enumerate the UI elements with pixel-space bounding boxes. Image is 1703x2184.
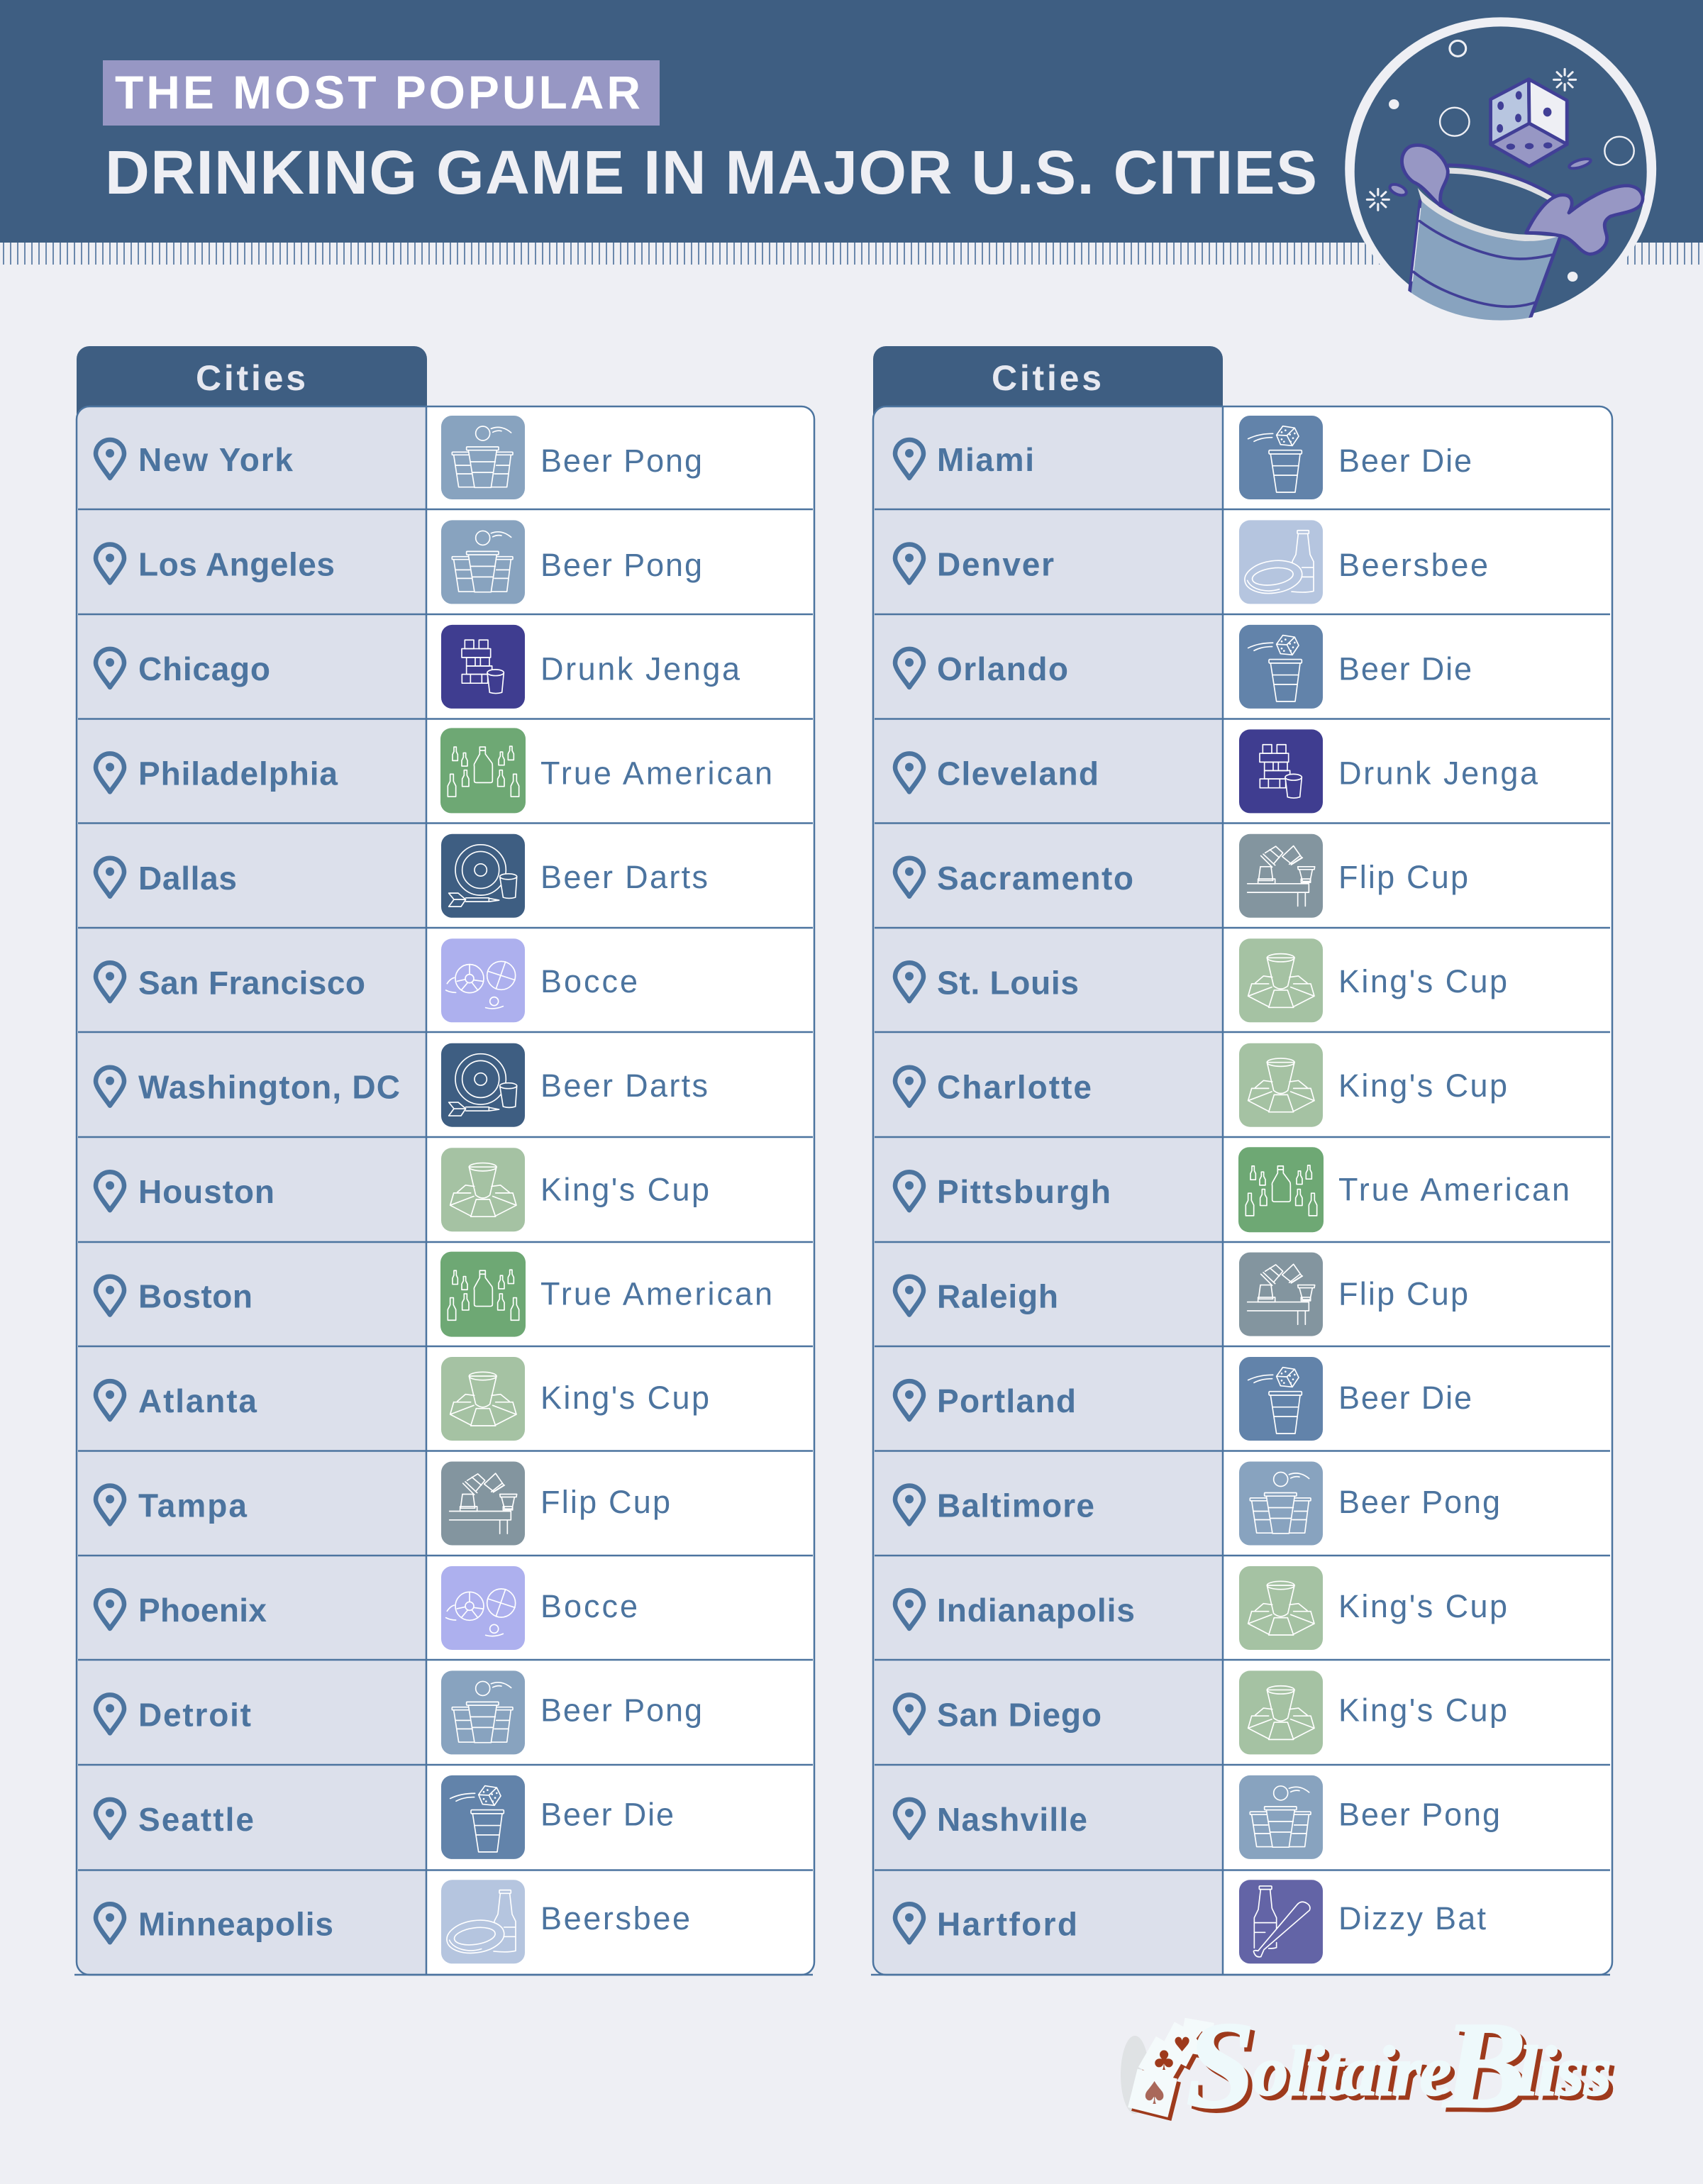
row: Hartford: Hartford bbox=[937, 1905, 1077, 1942]
row: Charlotte: Charlotte bbox=[937, 1069, 1092, 1106]
bubbles and sparkles bbox=[1367, 40, 1634, 282]
row: San Diego: King's Cup bbox=[1338, 1692, 1507, 1729]
row: San Francisco: San Francisco bbox=[138, 964, 365, 1001]
illustration: beer cup with die bbox=[1345, 17, 1656, 331]
row: Baltimore bbox=[895, 1461, 1500, 1545]
row: Portland: Portland bbox=[937, 1382, 1076, 1419]
row: Orlando bbox=[895, 625, 1472, 709]
row: Atlanta bbox=[96, 1357, 709, 1441]
row: Minneapolis: Beersbee bbox=[540, 1900, 690, 1936]
column tab: Cities: Cities bbox=[196, 358, 306, 398]
row: Raleigh: Flip Cup bbox=[1338, 1275, 1468, 1312]
row: Denver: Beersbee bbox=[1338, 547, 1488, 583]
cup bbox=[1402, 165, 1560, 331]
row: Cleveland: Drunk Jenga bbox=[1338, 755, 1538, 791]
row: Atlanta: King's Cup bbox=[540, 1380, 709, 1416]
row: Houston bbox=[96, 1148, 709, 1231]
row: Denver: Denver bbox=[937, 546, 1054, 583]
row: Indianapolis: Indianapolis bbox=[937, 1592, 1135, 1629]
row: Baltimore: Baltimore bbox=[937, 1487, 1094, 1524]
row: Sacramento: Flip Cup bbox=[1338, 859, 1468, 895]
row: Indianapolis bbox=[895, 1566, 1507, 1650]
row: Los Angeles bbox=[96, 520, 702, 604]
row: Miami bbox=[895, 416, 1472, 499]
row: Boston bbox=[96, 1252, 772, 1337]
logo cards: ♣ bbox=[1152, 2045, 1176, 2076]
row: Dallas bbox=[96, 834, 708, 918]
splash: left bbox=[1402, 145, 1451, 211]
row: Washington, DC: Washington, DC bbox=[138, 1069, 400, 1106]
row: Detroit bbox=[96, 1670, 702, 1754]
row: Sacramento bbox=[895, 834, 1468, 918]
splash: right bbox=[1526, 186, 1643, 254]
row: Tampa: Tampa bbox=[138, 1487, 247, 1524]
row: Charlotte bbox=[895, 1043, 1507, 1127]
row: Hartford: Dizzy Bat bbox=[1338, 1900, 1486, 1936]
row: Boston: Boston bbox=[138, 1278, 253, 1315]
row: Minneapolis: Minneapolis bbox=[138, 1905, 333, 1942]
row: San Diego bbox=[895, 1670, 1507, 1754]
row: Houston: King's Cup bbox=[540, 1172, 709, 1208]
row: Philadelphia bbox=[96, 728, 772, 813]
logo cards bbox=[1128, 2018, 1214, 2117]
panel: right table bbox=[871, 346, 1612, 1975]
logo wordmark: B bbox=[1442, 1996, 1526, 2134]
row: Nashville: Nashville bbox=[937, 1801, 1087, 1838]
row: Boston: True American bbox=[540, 1275, 772, 1312]
row: San Francisco bbox=[96, 938, 638, 1022]
row: Seattle: Seattle bbox=[138, 1801, 254, 1838]
row: Nashville bbox=[895, 1775, 1500, 1859]
logo cards: ♦ bbox=[1193, 2027, 1211, 2051]
row: Miami: Miami bbox=[937, 441, 1034, 478]
column tab: Cities bbox=[77, 346, 427, 435]
column tab: Cities bbox=[873, 346, 1223, 435]
row: Miami: Beer Die bbox=[1338, 443, 1472, 479]
row: Detroit: Beer Pong bbox=[540, 1692, 702, 1729]
row: Philadelphia: Philadelphia bbox=[138, 755, 338, 792]
logo: Solitaire Bliss bbox=[1121, 1996, 1612, 2134]
row: Los Angeles: Los Angeles bbox=[138, 546, 335, 583]
column tab: Cities: Cities bbox=[992, 358, 1102, 398]
row: Minneapolis bbox=[96, 1880, 690, 1963]
row: Nashville: Beer Pong bbox=[1338, 1796, 1500, 1832]
row: St. Louis: King's Cup bbox=[1338, 963, 1507, 999]
row: Phoenix: Bocce bbox=[540, 1588, 638, 1624]
row: Portland bbox=[895, 1357, 1472, 1441]
row: Los Angeles: Beer Pong bbox=[540, 547, 702, 583]
row: Dallas: Beer Darts bbox=[540, 859, 708, 895]
row: San Francisco: Bocce bbox=[540, 963, 638, 999]
row: Chicago bbox=[96, 625, 740, 709]
row: Hartford bbox=[895, 1880, 1486, 1963]
row: Pittsburgh bbox=[895, 1147, 1570, 1232]
row: Detroit: Detroit bbox=[138, 1696, 251, 1733]
logo wordmark: liss bbox=[1518, 2031, 1612, 2110]
subtitle tag: THE MOST POPULAR bbox=[115, 66, 640, 118]
row: Washington, DC: Beer Darts bbox=[540, 1068, 708, 1104]
row: Seattle: Beer Die bbox=[540, 1796, 674, 1832]
row: New York bbox=[96, 416, 702, 499]
row: Denver bbox=[895, 520, 1488, 604]
die bbox=[1491, 79, 1567, 166]
row: New York: Beer Pong bbox=[540, 443, 702, 479]
row: Pittsburgh: Pittsburgh bbox=[937, 1173, 1111, 1210]
row: Baltimore: Beer Pong bbox=[1338, 1484, 1500, 1520]
row: Raleigh bbox=[895, 1253, 1468, 1336]
row: Chicago: Drunk Jenga bbox=[540, 651, 740, 687]
row: Atlanta: Atlanta bbox=[138, 1382, 257, 1419]
row: Philadelphia: True American bbox=[540, 755, 772, 791]
row: Tampa: Flip Cup bbox=[540, 1484, 670, 1520]
row: Washington, DC bbox=[96, 1043, 708, 1127]
row: Indianapolis: King's Cup bbox=[1338, 1588, 1507, 1624]
row: Tampa bbox=[96, 1461, 670, 1545]
row: Sacramento: Sacramento bbox=[937, 860, 1133, 897]
row: Phoenix: Phoenix bbox=[138, 1592, 267, 1629]
row: Phoenix bbox=[96, 1566, 638, 1650]
row: Cleveland bbox=[895, 729, 1538, 813]
row: St. Louis bbox=[895, 938, 1507, 1022]
logo wordmark: olitaire bbox=[1253, 2031, 1451, 2110]
row: Dallas: Dallas bbox=[138, 860, 237, 897]
header band bbox=[0, 0, 1703, 243]
logo cards: ♥ bbox=[1173, 2033, 1191, 2056]
row: St. Louis: St. Louis bbox=[937, 964, 1079, 1001]
row: Orlando: Beer Die bbox=[1338, 651, 1472, 687]
logo wordmark: S bbox=[1186, 1996, 1255, 2134]
main title: DRINKING GAME IN MAJOR U.S. CITIES bbox=[105, 138, 1317, 207]
row: Houston: Houston bbox=[138, 1173, 274, 1210]
row: Orlando: Orlando bbox=[937, 650, 1068, 687]
row: Raleigh: Raleigh bbox=[937, 1278, 1058, 1315]
logo cards: ♠ bbox=[1141, 2075, 1168, 2112]
row: Charlotte: King's Cup bbox=[1338, 1068, 1507, 1104]
row: Portland: Beer Die bbox=[1338, 1380, 1472, 1416]
row: New York: New York bbox=[138, 441, 293, 478]
droplets bbox=[1388, 157, 1592, 197]
row: Chicago: Chicago bbox=[138, 650, 270, 687]
row: San Diego: San Diego bbox=[937, 1696, 1102, 1733]
row: Cleveland: Cleveland bbox=[937, 755, 1099, 792]
title block bbox=[103, 60, 1317, 207]
panel: left table bbox=[74, 346, 814, 1975]
row: Pittsburgh: True American bbox=[1338, 1172, 1570, 1208]
row: Seattle bbox=[96, 1775, 674, 1859]
